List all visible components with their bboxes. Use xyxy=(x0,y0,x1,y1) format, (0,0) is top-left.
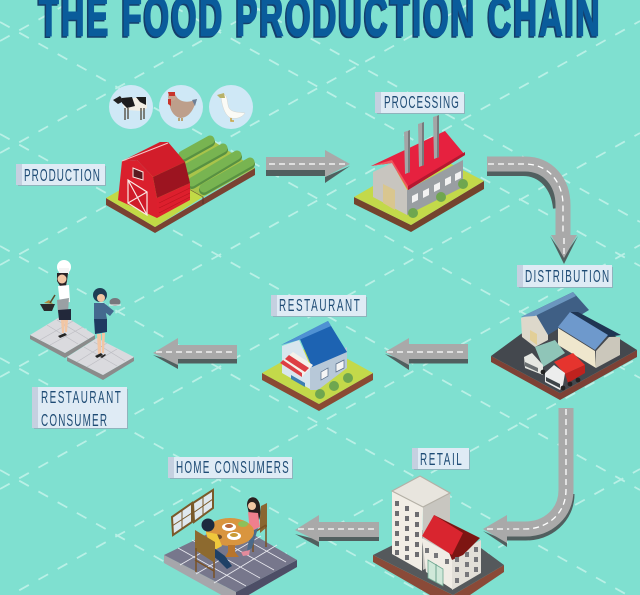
label: retail: RETAIL xyxy=(420,450,462,470)
farm: barn and field xyxy=(106,137,255,233)
arrow: restaurant to restaurant consumer xyxy=(153,338,237,369)
label: retail xyxy=(412,448,470,470)
factory xyxy=(354,115,484,232)
home consumers dining scene xyxy=(164,490,297,595)
icon: chicken xyxy=(159,85,203,129)
icon: goose xyxy=(209,85,253,129)
restaurant consumer tiles xyxy=(30,315,134,380)
label: home consumers: HOME CONSUMERS xyxy=(176,458,289,478)
arrow: retail to home consumers xyxy=(295,515,379,547)
distribution warehouse and trucks xyxy=(491,292,637,400)
icon: cow xyxy=(109,85,153,129)
label: restaurant: RESTAURANT xyxy=(279,296,360,316)
restaurant building xyxy=(262,321,373,411)
arrow: distribution to retail xyxy=(483,408,567,547)
waiter figure xyxy=(93,288,121,358)
chef figure xyxy=(40,260,71,338)
label: processing: PROCESSING xyxy=(384,93,459,113)
label: restaurant consumer: RESTAURANT xyxy=(41,388,121,408)
label: restaurant consumer: CONSUMER xyxy=(41,411,107,431)
label: production: PRODUCTION xyxy=(24,166,100,186)
retail buildings xyxy=(373,476,504,595)
arrow: distribution to restaurant xyxy=(385,338,468,370)
arrow: production to processing xyxy=(266,150,350,183)
arrow: processing to distribution xyxy=(487,164,578,264)
label: distribution: DISTRIBUTION xyxy=(525,267,609,287)
label: restaurant consumer xyxy=(32,387,128,431)
